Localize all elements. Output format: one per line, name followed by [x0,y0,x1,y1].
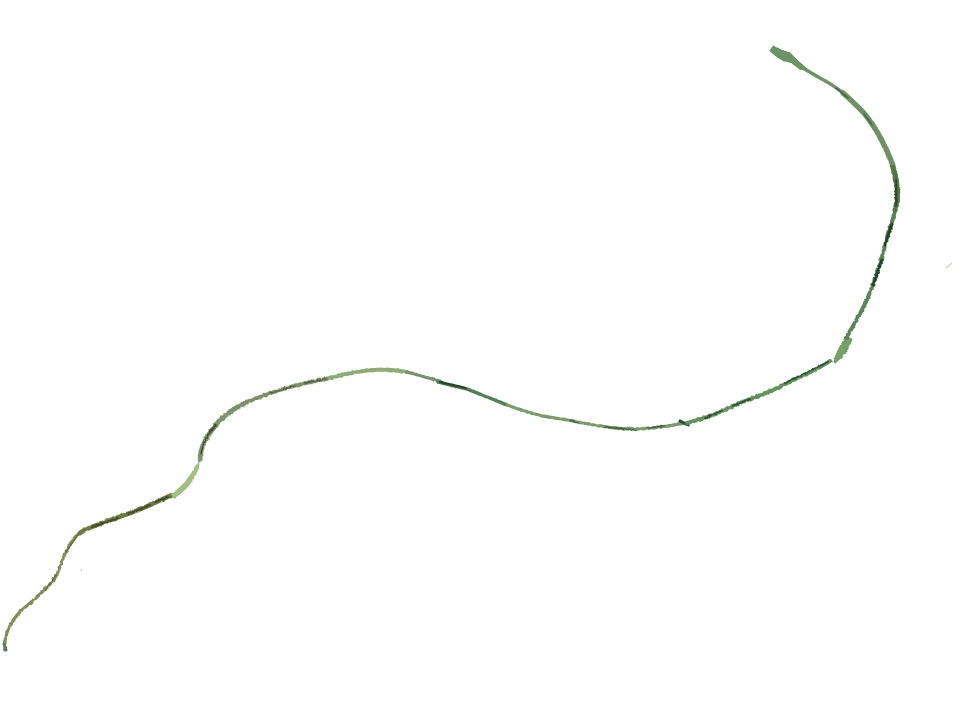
vine section: pale crest [330,370,440,381]
vine section: rising dark stem [687,361,830,423]
stray mark: small speck at left [81,569,82,571]
vine section: dark descending stem [438,382,507,405]
vine section: dark lower stem [80,495,172,533]
vine section: top arc [803,68,892,163]
illustration: green vine [4,46,898,650]
vine tip: frayed end [770,46,806,70]
vine section: bright leaf segment [834,336,852,363]
vine section: rising curve [200,378,330,460]
vine section: pale green leaf blade [171,462,199,498]
vine section: root end [4,533,80,650]
vine section: lower arc [507,405,688,430]
stray mark: small stroke at right [946,263,952,268]
vine section: upper right stem [846,163,898,338]
